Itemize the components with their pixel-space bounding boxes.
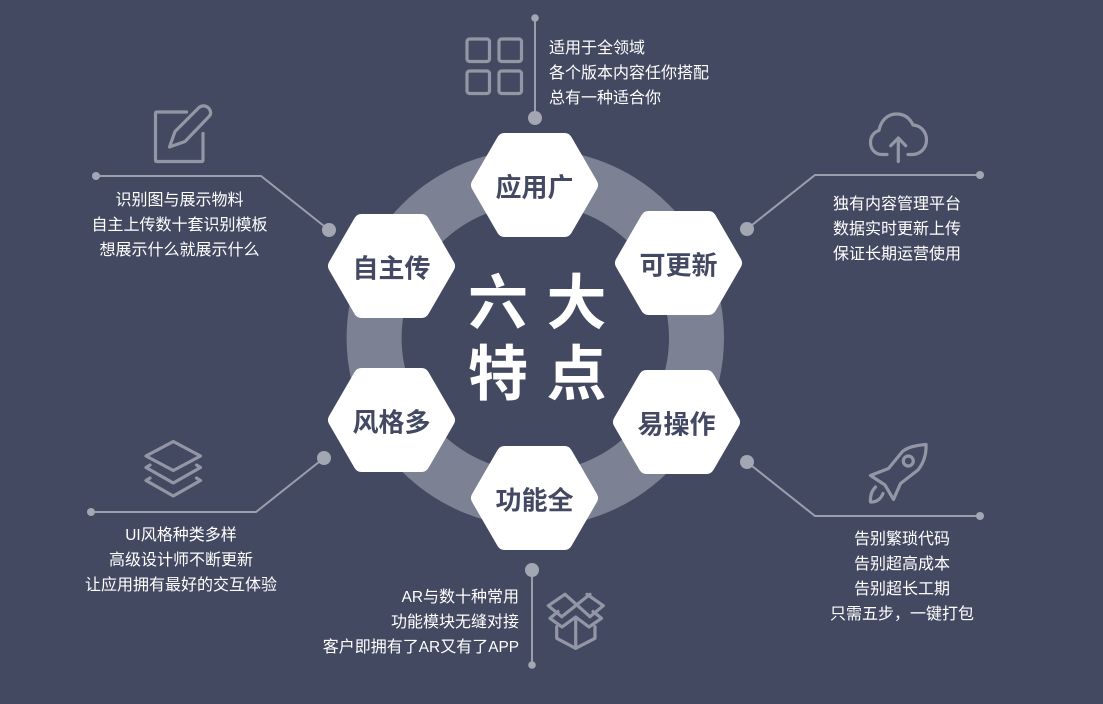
text block: 告别繁琐代码 <box>854 530 950 548</box>
text block: 想展示什么就展示什么 <box>99 241 260 259</box>
panel: 易操作 callout <box>740 444 984 623</box>
text block: 保证长期运营使用 <box>833 245 961 263</box>
text block <box>830 530 974 623</box>
connector line <box>740 455 984 520</box>
text block: 只需五步，一键打包 <box>830 605 974 623</box>
hexagon: 自主传: 自主传 <box>352 254 431 284</box>
title: 六大特点: 特 <box>468 341 528 408</box>
text block <box>549 39 709 107</box>
hexagon: 应用广: 应用广 <box>495 172 574 202</box>
hexagon: 功能全: 功能全 <box>495 486 574 516</box>
hexagon: 应用广 <box>479 141 590 229</box>
panel: 应用广 callout <box>467 14 709 125</box>
text block: AR与数十种常用 <box>402 588 519 606</box>
text block: 功能模块无缝对接 <box>391 613 519 631</box>
icon: stacked layers <box>146 442 200 496</box>
hexagon: 功能全 <box>479 454 590 542</box>
text block: 总有一种适合你 <box>549 89 661 107</box>
hexagon: 可更新 <box>623 219 734 307</box>
hexagon: 风格多 <box>336 376 447 464</box>
hexagon: 易操作 <box>621 378 732 466</box>
text block: 识别图与展示物料 <box>115 191 244 209</box>
icon: pencil on square <box>156 106 211 162</box>
central ring <box>374 177 696 499</box>
connector line <box>87 451 331 516</box>
connector line <box>740 171 984 236</box>
title: 六大特点: 点 <box>546 341 606 408</box>
panel: 可更新 callout <box>740 114 984 263</box>
text block: 让应用拥有最好的交互体验 <box>85 575 277 594</box>
panel: 自主传 callout <box>91 106 336 259</box>
text block: 告别超长工期 <box>854 580 950 598</box>
connector line <box>528 14 542 125</box>
title: 六大特点: 六 <box>468 270 528 337</box>
title: 六大特点: 大 <box>546 270 606 337</box>
panel: 风格多 callout <box>85 442 331 594</box>
text block <box>323 588 519 656</box>
panel: 功能全 callout <box>323 563 603 669</box>
text block: 自主上传数十套识别模板 <box>91 216 268 234</box>
icon: rocket <box>870 444 926 502</box>
icon: open box <box>548 594 603 648</box>
text block <box>85 526 277 594</box>
text block: 数据实时更新上传 <box>833 220 961 238</box>
hexagon: 自主传 <box>336 222 447 310</box>
text block: 适用于全领域 <box>549 39 645 57</box>
hexagon: 易操作: 易操作 <box>637 410 716 440</box>
title: 六大特点 <box>468 270 606 408</box>
connector line <box>525 563 539 669</box>
text block <box>91 191 268 259</box>
text block: 客户即拥有了AR又有了APP <box>323 638 519 656</box>
hexagon: 可更新: 可更新 <box>639 250 718 280</box>
text block: 告别超高成本 <box>854 555 950 573</box>
connector line <box>92 172 336 237</box>
text block: 独有内容管理平台 <box>833 195 961 213</box>
text block: UI风格种类多样 <box>125 526 237 544</box>
icon: four squares grid <box>467 39 522 94</box>
hexagon: 风格多: 风格多 <box>352 408 431 438</box>
icon: cloud upload <box>870 114 926 162</box>
text block: 高级设计师不断更新 <box>109 551 253 569</box>
text block: 各个版本内容任你搭配 <box>549 64 709 82</box>
text block <box>833 195 961 263</box>
